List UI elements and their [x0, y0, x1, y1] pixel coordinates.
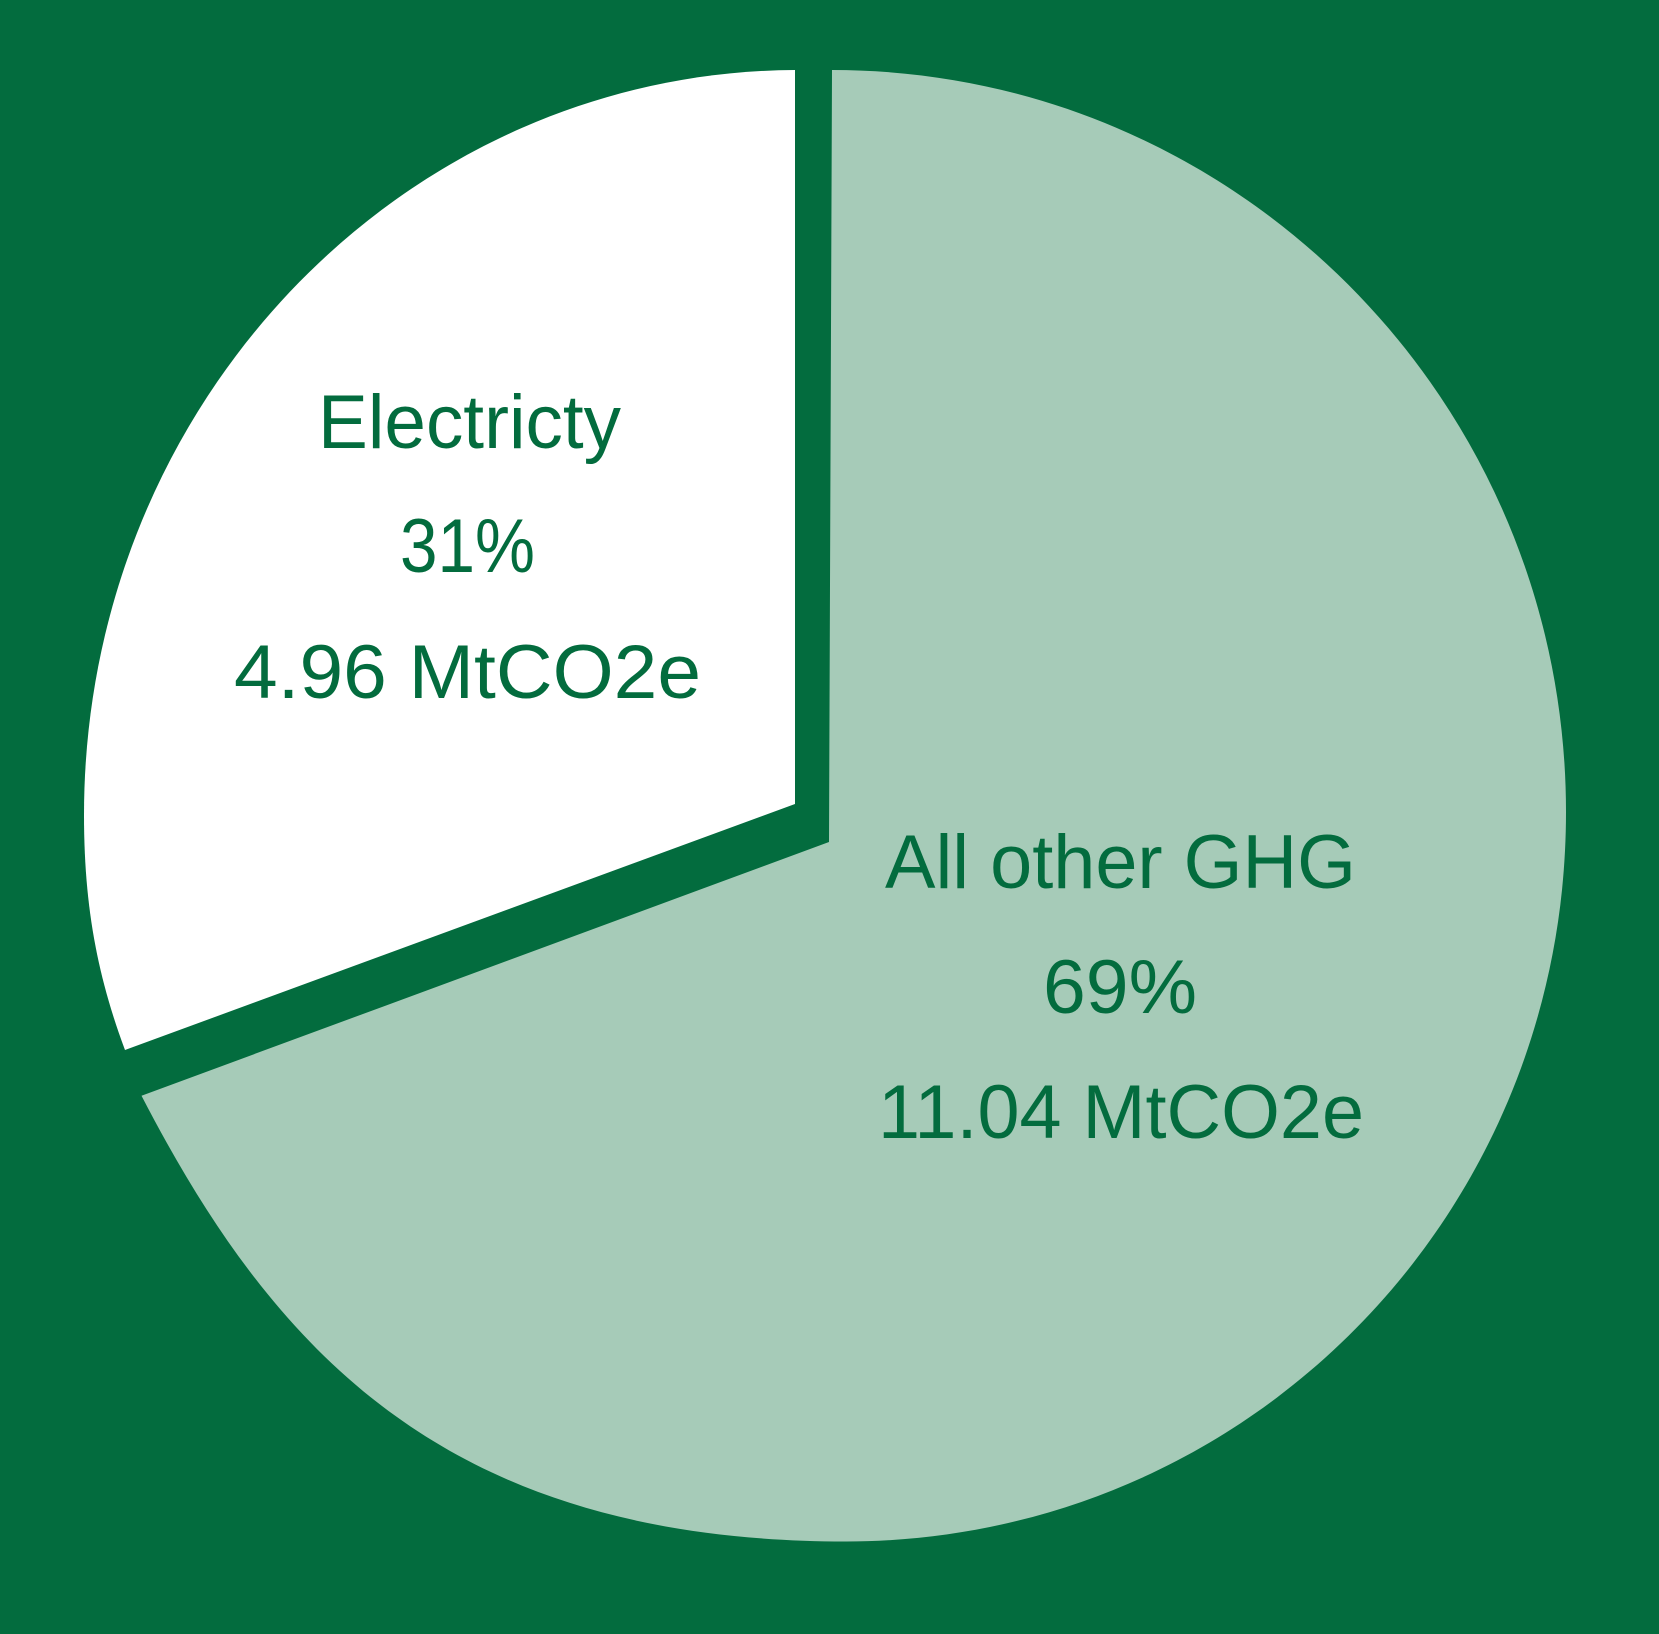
slice: all other GHG 69% [142, 70, 1566, 1542]
label text: 11.04 MtCO2e: 11.04 MtCO2e [878, 1070, 1364, 1155]
label: all other GHG [878, 820, 1364, 1155]
label text: 31%: 31% [400, 504, 535, 589]
label text: 4.96 MtCO2e: 4.96 MtCO2e [234, 630, 701, 715]
label text: Electricty: Electricty [318, 380, 621, 465]
slice: electricity 31% [84, 70, 795, 1050]
label text: All other GHG: All other GHG [885, 820, 1356, 905]
label text: 69%: 69% [1043, 945, 1197, 1030]
label: electricity [234, 380, 701, 715]
